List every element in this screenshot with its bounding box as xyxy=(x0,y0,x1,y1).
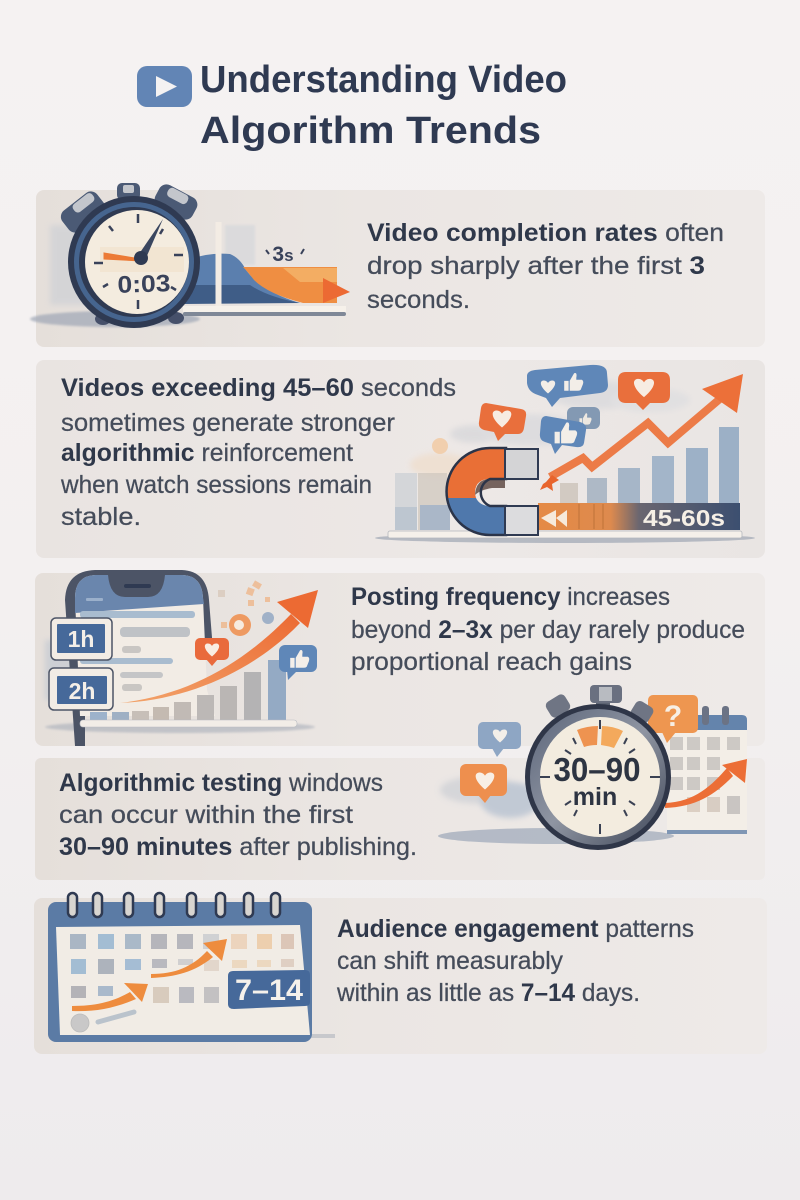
duration bar xyxy=(538,503,740,531)
text: posting frequency: beyond 2–3x per day rarely produce xyxy=(351,616,745,644)
heading line one: Understanding Video xyxy=(200,59,567,101)
bubble: orange heart right xyxy=(618,372,670,410)
base shelf xyxy=(375,531,755,543)
bubble: likes top xyxy=(527,365,608,407)
orange circle xyxy=(229,614,251,636)
tag: 1h: 1h xyxy=(68,626,94,652)
calendar paper xyxy=(56,925,310,1035)
calendar arrow xyxy=(665,759,747,808)
text: posting frequency: Posting frequency increases xyxy=(351,583,670,611)
growth arrow xyxy=(120,590,318,703)
panel background xyxy=(34,898,767,1054)
bubble: orange heart left xyxy=(479,403,526,441)
faded left bars xyxy=(395,473,450,530)
calendar xyxy=(665,706,747,834)
text: posting frequency xyxy=(351,583,745,676)
text: long videos xyxy=(60,374,456,531)
text: engagement patterns: within as little as 7–14 days. xyxy=(336,979,640,1007)
text: testing windows: can occur within the first xyxy=(59,801,353,829)
phone xyxy=(65,570,215,746)
text: long videos: sometimes generate stronger xyxy=(61,409,395,437)
day grid xyxy=(70,934,294,1032)
magnet xyxy=(447,448,538,535)
tag: 2h xyxy=(49,668,113,710)
tag: 7-14: 7–14 xyxy=(235,974,303,1007)
confetti xyxy=(218,580,274,628)
readout: min: min xyxy=(573,783,617,811)
text: long videos: stable. xyxy=(61,503,141,531)
label: 3s: 3s xyxy=(272,243,294,266)
text: engagement patterns xyxy=(336,915,694,1007)
heading line two: Algorithm Trends xyxy=(200,110,541,152)
bubble: thumbs up xyxy=(279,645,317,680)
bubble: blue heart xyxy=(478,722,521,757)
text: posting frequency: proportional reach gains xyxy=(351,648,632,676)
like bubbles xyxy=(479,365,670,454)
panel background xyxy=(35,758,765,880)
text: long videos: when watch sessions remain xyxy=(60,471,372,499)
tag: 7-14 xyxy=(228,970,310,1009)
text: long videos: Videos exceeding 45–60 seconds xyxy=(61,374,456,402)
clock readout: 0:03 xyxy=(117,270,171,299)
bubble: heart xyxy=(195,638,229,666)
panel: long videos xyxy=(36,360,765,558)
title block xyxy=(137,59,567,152)
text: engagement patterns: can shift measurably xyxy=(337,947,563,975)
label: 3s xyxy=(266,243,304,266)
illustration: calendar with trend xyxy=(48,893,335,1042)
calendar rings xyxy=(68,893,280,917)
alarm clock xyxy=(58,182,200,328)
icon: alarm clock with retention chart xyxy=(30,182,350,328)
bubble: question: ? xyxy=(664,700,682,733)
bar chart xyxy=(560,427,739,503)
panel background xyxy=(35,573,765,746)
bubble: orange heart xyxy=(460,764,507,803)
trend arrows xyxy=(72,939,227,1011)
bubble: question xyxy=(648,695,698,743)
text: completion rates xyxy=(367,219,724,314)
icon: video play badge xyxy=(137,66,192,107)
stopwatch xyxy=(525,685,671,850)
illustration: stopwatch and calendar xyxy=(438,685,747,850)
text: testing windows: 30–90 minutes after publishing. xyxy=(59,833,417,861)
illustration: magnet and engagement growth xyxy=(375,365,755,543)
text: testing windows xyxy=(59,769,417,861)
bubble: thumbs up xyxy=(540,407,600,454)
panel: posting frequency xyxy=(35,570,765,746)
panel: engagement patterns xyxy=(34,893,767,1054)
growth arrow xyxy=(540,374,743,491)
calendar body xyxy=(48,902,312,1042)
text: long videos: algorithmic reinforcement xyxy=(61,439,353,467)
tag: 2h: 2h xyxy=(69,678,95,704)
text: completion rates: Video completion rates often xyxy=(367,219,724,247)
illustration: phone and posting growth xyxy=(45,570,318,746)
text: completion rates: drop sharply after the first 3 xyxy=(367,252,705,280)
text: completion rates: seconds. xyxy=(367,286,470,314)
retention chart xyxy=(183,222,350,316)
text: testing windows: Algorithmic testing windows xyxy=(59,769,383,797)
ground shadow xyxy=(438,828,674,844)
tag: 1h xyxy=(51,618,112,660)
readout: 30-90: 30–90 xyxy=(554,751,640,788)
bar chart xyxy=(80,660,297,727)
text: engagement patterns: Audience engagement patterns xyxy=(337,915,694,943)
panel background xyxy=(36,190,765,347)
label: 45-60s: 45-60s xyxy=(643,505,725,531)
panel: completion rates xyxy=(30,182,765,347)
panel background xyxy=(36,360,765,558)
panel: testing windows xyxy=(35,685,765,880)
